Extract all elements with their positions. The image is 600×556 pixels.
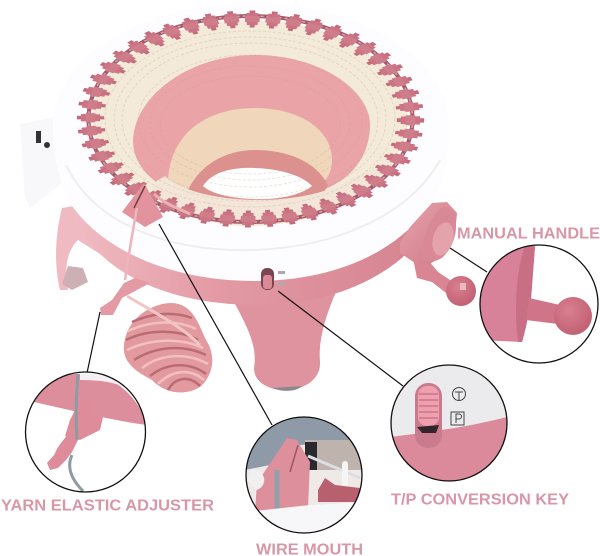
label: yarn elastic adjuster: YARN ELASTIC ADJUSTER (1, 498, 214, 514)
needle ring (88, 16, 412, 222)
foot shadow (272, 386, 302, 391)
control box (20, 118, 66, 208)
centre leg (232, 292, 336, 390)
knitting machine (20, 3, 476, 391)
pink base (72, 215, 432, 305)
outer pink band (133, 55, 370, 195)
callout: wire mouth (245, 415, 365, 540)
left leg (56, 205, 150, 290)
left foot clamp (62, 266, 88, 290)
leader lines (87, 224, 487, 425)
inner cream band (168, 108, 332, 205)
hanging yarn (125, 208, 137, 280)
yarn elastic adjuster (100, 278, 150, 315)
T/P switch (261, 268, 285, 290)
yarn ball (124, 296, 212, 392)
knitted fabric (92, 20, 408, 226)
stitch rows (105, 31, 395, 207)
inner pink band (188, 150, 328, 200)
callout: manual handle (478, 243, 598, 363)
manual handle (400, 202, 476, 306)
front cream band (150, 160, 395, 226)
label: manual handle: MANUAL HANDLE (457, 226, 600, 242)
wire mouth carriage (122, 183, 163, 227)
centre hole (203, 168, 312, 199)
white body (53, 3, 449, 281)
callout: T/P conversion key (390, 365, 510, 490)
callout: yarn elastic adjuster (26, 372, 146, 492)
label: T/P conversion key: T/P CONVERSION KEY (391, 492, 569, 508)
